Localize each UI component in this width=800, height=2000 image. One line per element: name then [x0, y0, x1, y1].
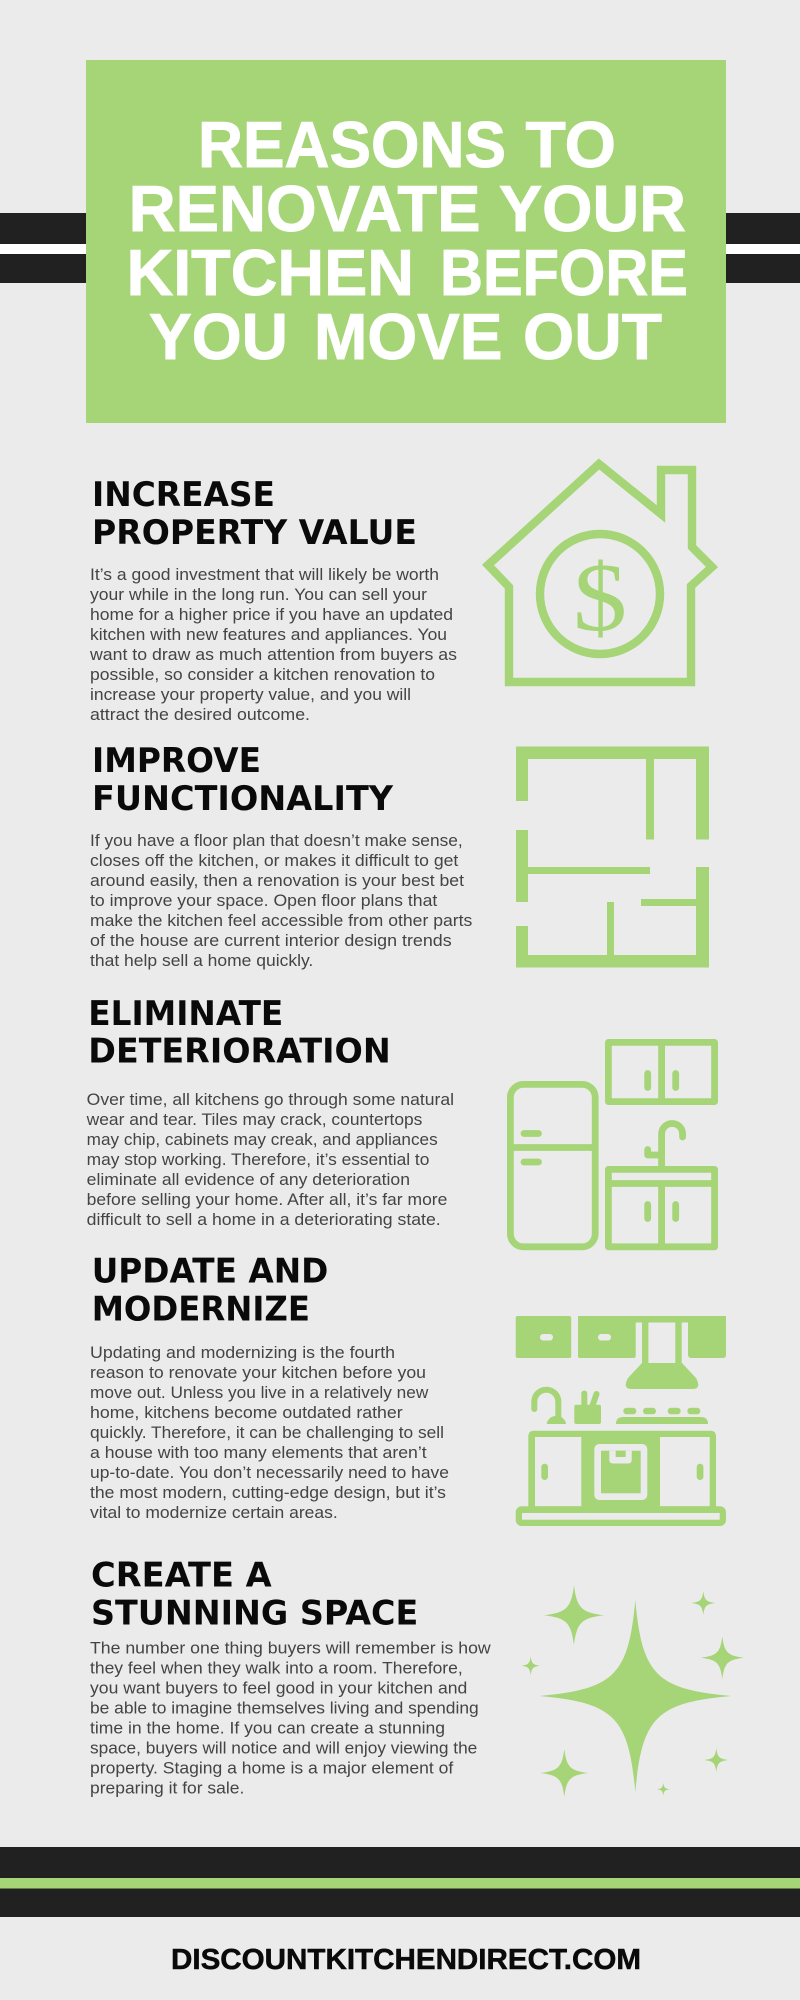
icon: house with dollar: $ [573, 544, 627, 652]
icon: sparkles [521, 1585, 744, 1797]
top stripes behind title [0, 213, 800, 283]
heading: improve functionality: IMPROVE [92, 741, 261, 781]
heading: create a stunning space: CREATE A [91, 1556, 272, 1596]
heading: create a stunning space: STUNNING SPACE [91, 1593, 418, 1633]
heading: update and modernize: UPDATE AND [92, 1252, 328, 1292]
body text: update and modernize: vital to modernize certain areas. [90, 1503, 338, 1522]
body text: update and modernize: up-to-date. You don’t necessarily need to have [90, 1463, 449, 1482]
body text: increase property value: your while in the long run. You can sell your [90, 585, 427, 604]
body text: update and modernize: a house with too many elements that aren’t [90, 1443, 427, 1462]
body text: increase property value: possible, so consider a kitchen renovation to [90, 665, 435, 684]
body text: eliminate deterioration: wear and tear. Tiles may crack, countertops [86, 1110, 422, 1129]
body text: improve functionality: make the kitchen feel accessible from other parts [90, 911, 472, 930]
heading: update and modernize [92, 1252, 328, 1330]
body text: update and modernize: quickly. Therefore, it can be challenging to sell [90, 1423, 444, 1442]
body text: increase property value: kitchen with new features and appliances. You [90, 625, 447, 644]
title: MOVE [314, 300, 502, 373]
body text: create a stunning space: preparing it for sale. [90, 1778, 244, 1797]
title: YOUR [499, 172, 686, 245]
title: YOU [149, 300, 288, 373]
icon: fridge and cabinets [510, 1042, 715, 1247]
heading: improve functionality: FUNCTIONALITY [92, 779, 393, 819]
heading: update and modernize: MODERNIZE [92, 1290, 310, 1330]
heading: increase property value [92, 475, 417, 553]
body text: improve functionality [90, 831, 472, 970]
section 4: update and modernize [90, 1252, 726, 1526]
body text: increase property value: want to draw as much attention from buyers as [89, 645, 457, 664]
body text: improve functionality: closes off the kitchen, or makes it difficult to get [90, 851, 459, 870]
body text: create a stunning space: time in the home. If you can create a stunning [90, 1718, 445, 1737]
body text: eliminate deterioration: difficult to sell a home in a deteriorating state. [87, 1210, 441, 1229]
body text: increase property value: home for a higher price if you have an updated [90, 605, 453, 624]
section 2: improve functionality [90, 741, 709, 970]
body text: improve functionality: to improve your space. Open floor plans that [90, 891, 438, 910]
body text: update and modernize: Updating and modernizing is the fourth [90, 1343, 395, 1362]
title: OUT [523, 300, 662, 373]
body text: create a stunning space: property. Staging a home is a major element of [90, 1758, 454, 1777]
icon: floor plan [516, 746, 709, 968]
body text: update and modernize: move out. Unless you live in a relatively new [90, 1383, 429, 1402]
section 3: eliminate deterioration [86, 994, 715, 1247]
body text: improve functionality: that help sell a home quickly. [90, 951, 313, 970]
body text: create a stunning space: they feel when they walk into a room. Therefore, [90, 1658, 463, 1677]
body text: eliminate deterioration: may chip, cabinets may creak, and appliances [87, 1130, 438, 1149]
heading: eliminate deterioration: ELIMINATE [88, 994, 283, 1034]
body text: eliminate deterioration: may stop working. Therefore, it’s essential to [87, 1150, 429, 1169]
body text: create a stunning space: space, buyers will notice and will enjoy viewing the [90, 1738, 477, 1757]
body text: update and modernize: home, kitchens become outdated rather [90, 1403, 403, 1422]
body text: improve functionality: of the house are current interior design trends [90, 931, 452, 950]
heading: increase property value: INCREASE [92, 475, 275, 515]
body text: increase property value: increase your property value, and you will [90, 685, 411, 704]
body text: improve functionality: around easily, then a renovation is your best bet [90, 871, 464, 890]
body text: increase property value: It’s a good investment that will likely be worth [90, 565, 439, 584]
heading: eliminate deterioration: DETERIORATION [88, 1032, 391, 1072]
body text: eliminate deterioration [86, 1090, 454, 1229]
title: KITCHEN [126, 236, 414, 309]
body text: increase property value [89, 565, 457, 724]
heading: improve functionality [92, 741, 393, 819]
footer stripes [0, 1847, 800, 1917]
body text: update and modernize [90, 1343, 449, 1522]
body text: improve functionality: If you have a floor plan that doesn’t make sense, [90, 831, 463, 850]
footer website: DISCOUNTKITCHENDIRECT.COM [171, 1944, 641, 1976]
body text: eliminate deterioration: Over time, all kitchens go through some natural [87, 1090, 454, 1109]
title: TO [526, 108, 616, 181]
body text: update and modernize: the most modern, cutting-edge design, but it’s [90, 1483, 446, 1502]
title: BEFORE [440, 236, 688, 309]
title [126, 108, 688, 373]
body text: increase property value: attract the desired outcome. [90, 705, 310, 724]
section 1: increase property value [89, 464, 712, 724]
title: REASONS [198, 108, 506, 181]
section 5: create a stunning space [90, 1556, 744, 1797]
heading: increase property value: PROPERTY VALUE [92, 513, 417, 553]
title panel [86, 60, 726, 423]
icon: house with dollar [488, 464, 712, 682]
heading: eliminate deterioration [88, 994, 391, 1072]
body text: create a stunning space [90, 1638, 491, 1797]
icon: full kitchen [516, 1316, 726, 1526]
body text: eliminate deterioration: before selling your home. After all, it’s far more [87, 1190, 447, 1209]
body text: create a stunning space: be able to imagine themselves living and spending [90, 1698, 479, 1717]
body text: eliminate deterioration: eliminate all evidence of any deterioration [87, 1170, 410, 1189]
heading: create a stunning space [91, 1556, 418, 1633]
body text: create a stunning space: The number one thing buyers will remember is how [90, 1638, 491, 1657]
body text: update and modernize: reason to renovate your kitchen before you [90, 1363, 426, 1382]
body text: create a stunning space: you want buyers to feel good in your kitchen and [90, 1678, 467, 1697]
title: RENOVATE [129, 172, 481, 245]
